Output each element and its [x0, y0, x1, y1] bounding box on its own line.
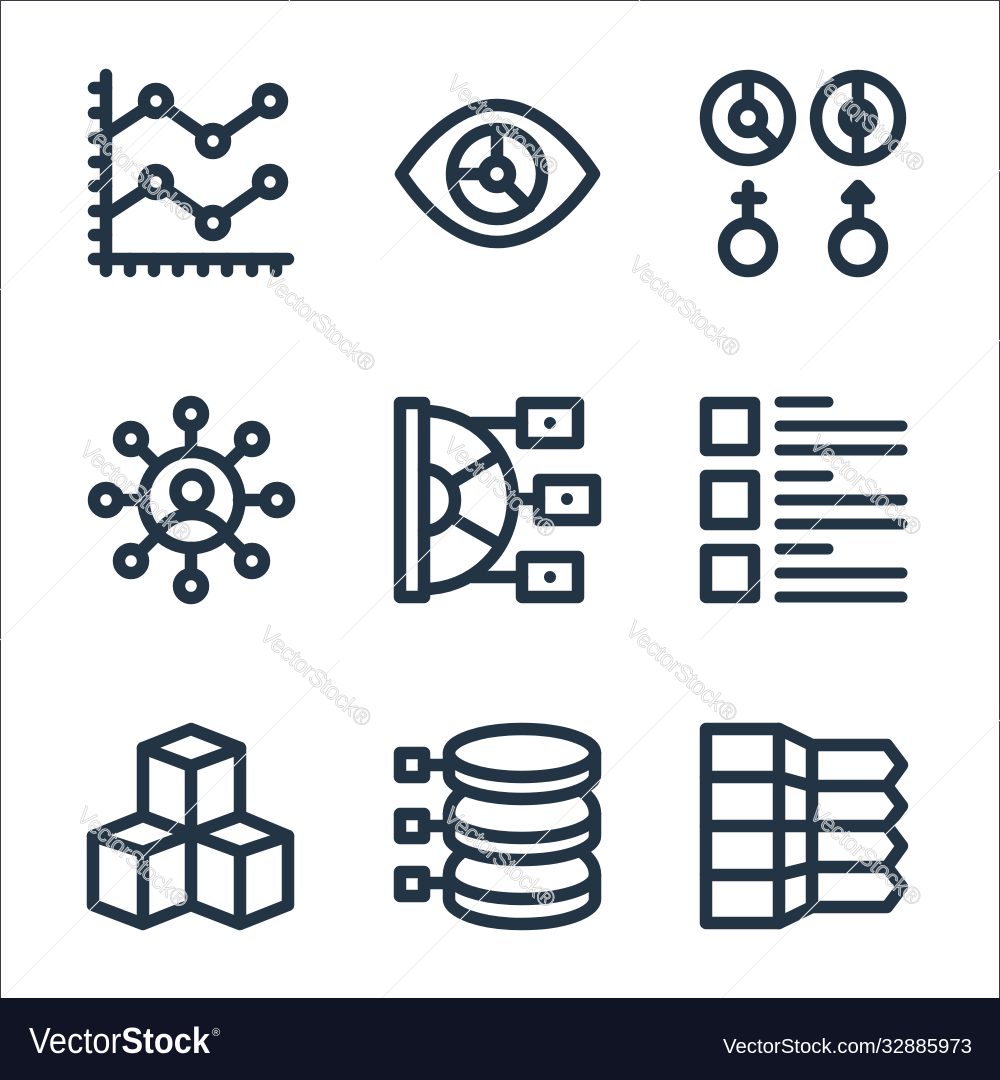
footer image id: VectorStock.com/32885973: [723, 1036, 972, 1058]
watermarks: VectorStock®: [71, 802, 194, 914]
watermarks: VectorStock®: [804, 800, 927, 912]
watermarks: VectorStock®: [438, 432, 561, 544]
icon: stacked cubes: [93, 729, 288, 924]
watermarks: VectorStock®: [74, 436, 197, 548]
watermarks: VectorStock®: [620, 616, 743, 728]
icon: table with arrow tabs: [706, 729, 902, 923]
footer logo: VectorStock: [29, 1020, 211, 1061]
icon: pie charts by gender: [706, 76, 900, 271]
watermarks: VectorStock®: [76, 116, 199, 228]
footer bar: [0, 998, 1000, 1080]
footer registered mark: ®: [212, 1027, 220, 1039]
icon: database with three nodes: [400, 729, 595, 924]
icon: user network: [94, 402, 289, 598]
icon: eye with pie chart: [401, 105, 594, 242]
icon: checklist: [706, 402, 902, 597]
watermarks: VectorStock®: [804, 430, 927, 542]
watermarks: VectorStock®: [623, 251, 746, 363]
watermarks: VectorStock®: [438, 802, 561, 914]
icon: line chart: [94, 75, 288, 271]
watermarks: VectorStock®: [807, 66, 930, 178]
watermarks: VectorStock®: [441, 70, 564, 182]
icon: semicircle diagram with three boxes: [400, 403, 595, 597]
watermarks: VectorStock®: [254, 621, 377, 733]
watermarks: VectorStock®: [258, 266, 381, 378]
